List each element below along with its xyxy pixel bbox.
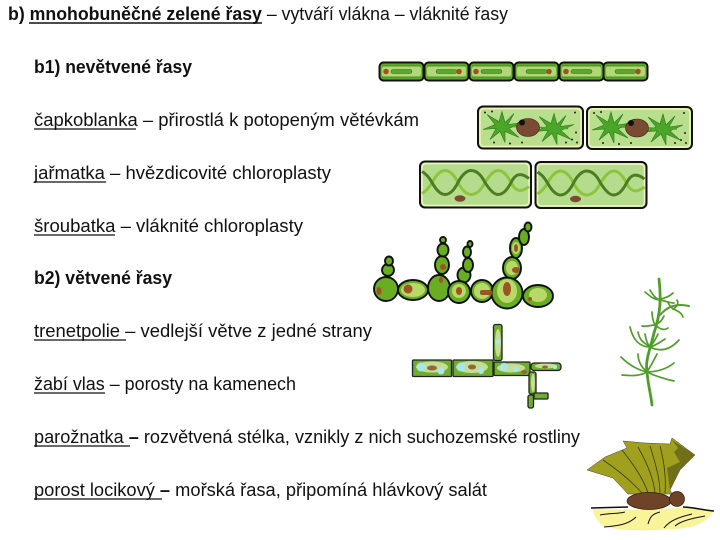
text: parožnatka: parožnatka – rozvětvená stélka, vznikly z nich suchozemské rostliny (34, 427, 580, 447)
text: trenetpolie: trenetpolie – vedlejší větve z jedné strany (34, 321, 372, 341)
text: čapkoblanka: čapkoblanka – přirostlá k potopeným větévkám (34, 110, 419, 130)
text: porost locikový: porost locikový – mořská řasa, připomíná hlávkový salát (34, 480, 487, 500)
heading: b1 unbranched algae: b1) nevětvené řasy (34, 57, 192, 77)
illustration: jařmatka cells (420, 162, 646, 208)
illustration: čapkoblanka cells (478, 106, 692, 149)
illustration: branched green alga (374, 222, 553, 308)
text: šroubatka: šroubatka – vláknité chloroplasty (34, 216, 303, 236)
illustration: porost locikový lettuce (587, 438, 714, 530)
heading: b2 branched algae: b2) větvené řasy (34, 268, 172, 288)
illustration: žabí vlas branching filament (412, 324, 561, 408)
illustration: parožnatka plant (621, 279, 689, 405)
text: jařmatka: jařmatka – hvězdicovité chloroplasty (33, 163, 331, 183)
text: žabí vlas: žabí vlas – porosty na kamenech (34, 374, 296, 394)
title: b) mnohobuněčné zelené řasy – vytváří vlákna – vláknité řasy (8, 4, 508, 24)
illustration: unbranched filament (380, 62, 648, 80)
